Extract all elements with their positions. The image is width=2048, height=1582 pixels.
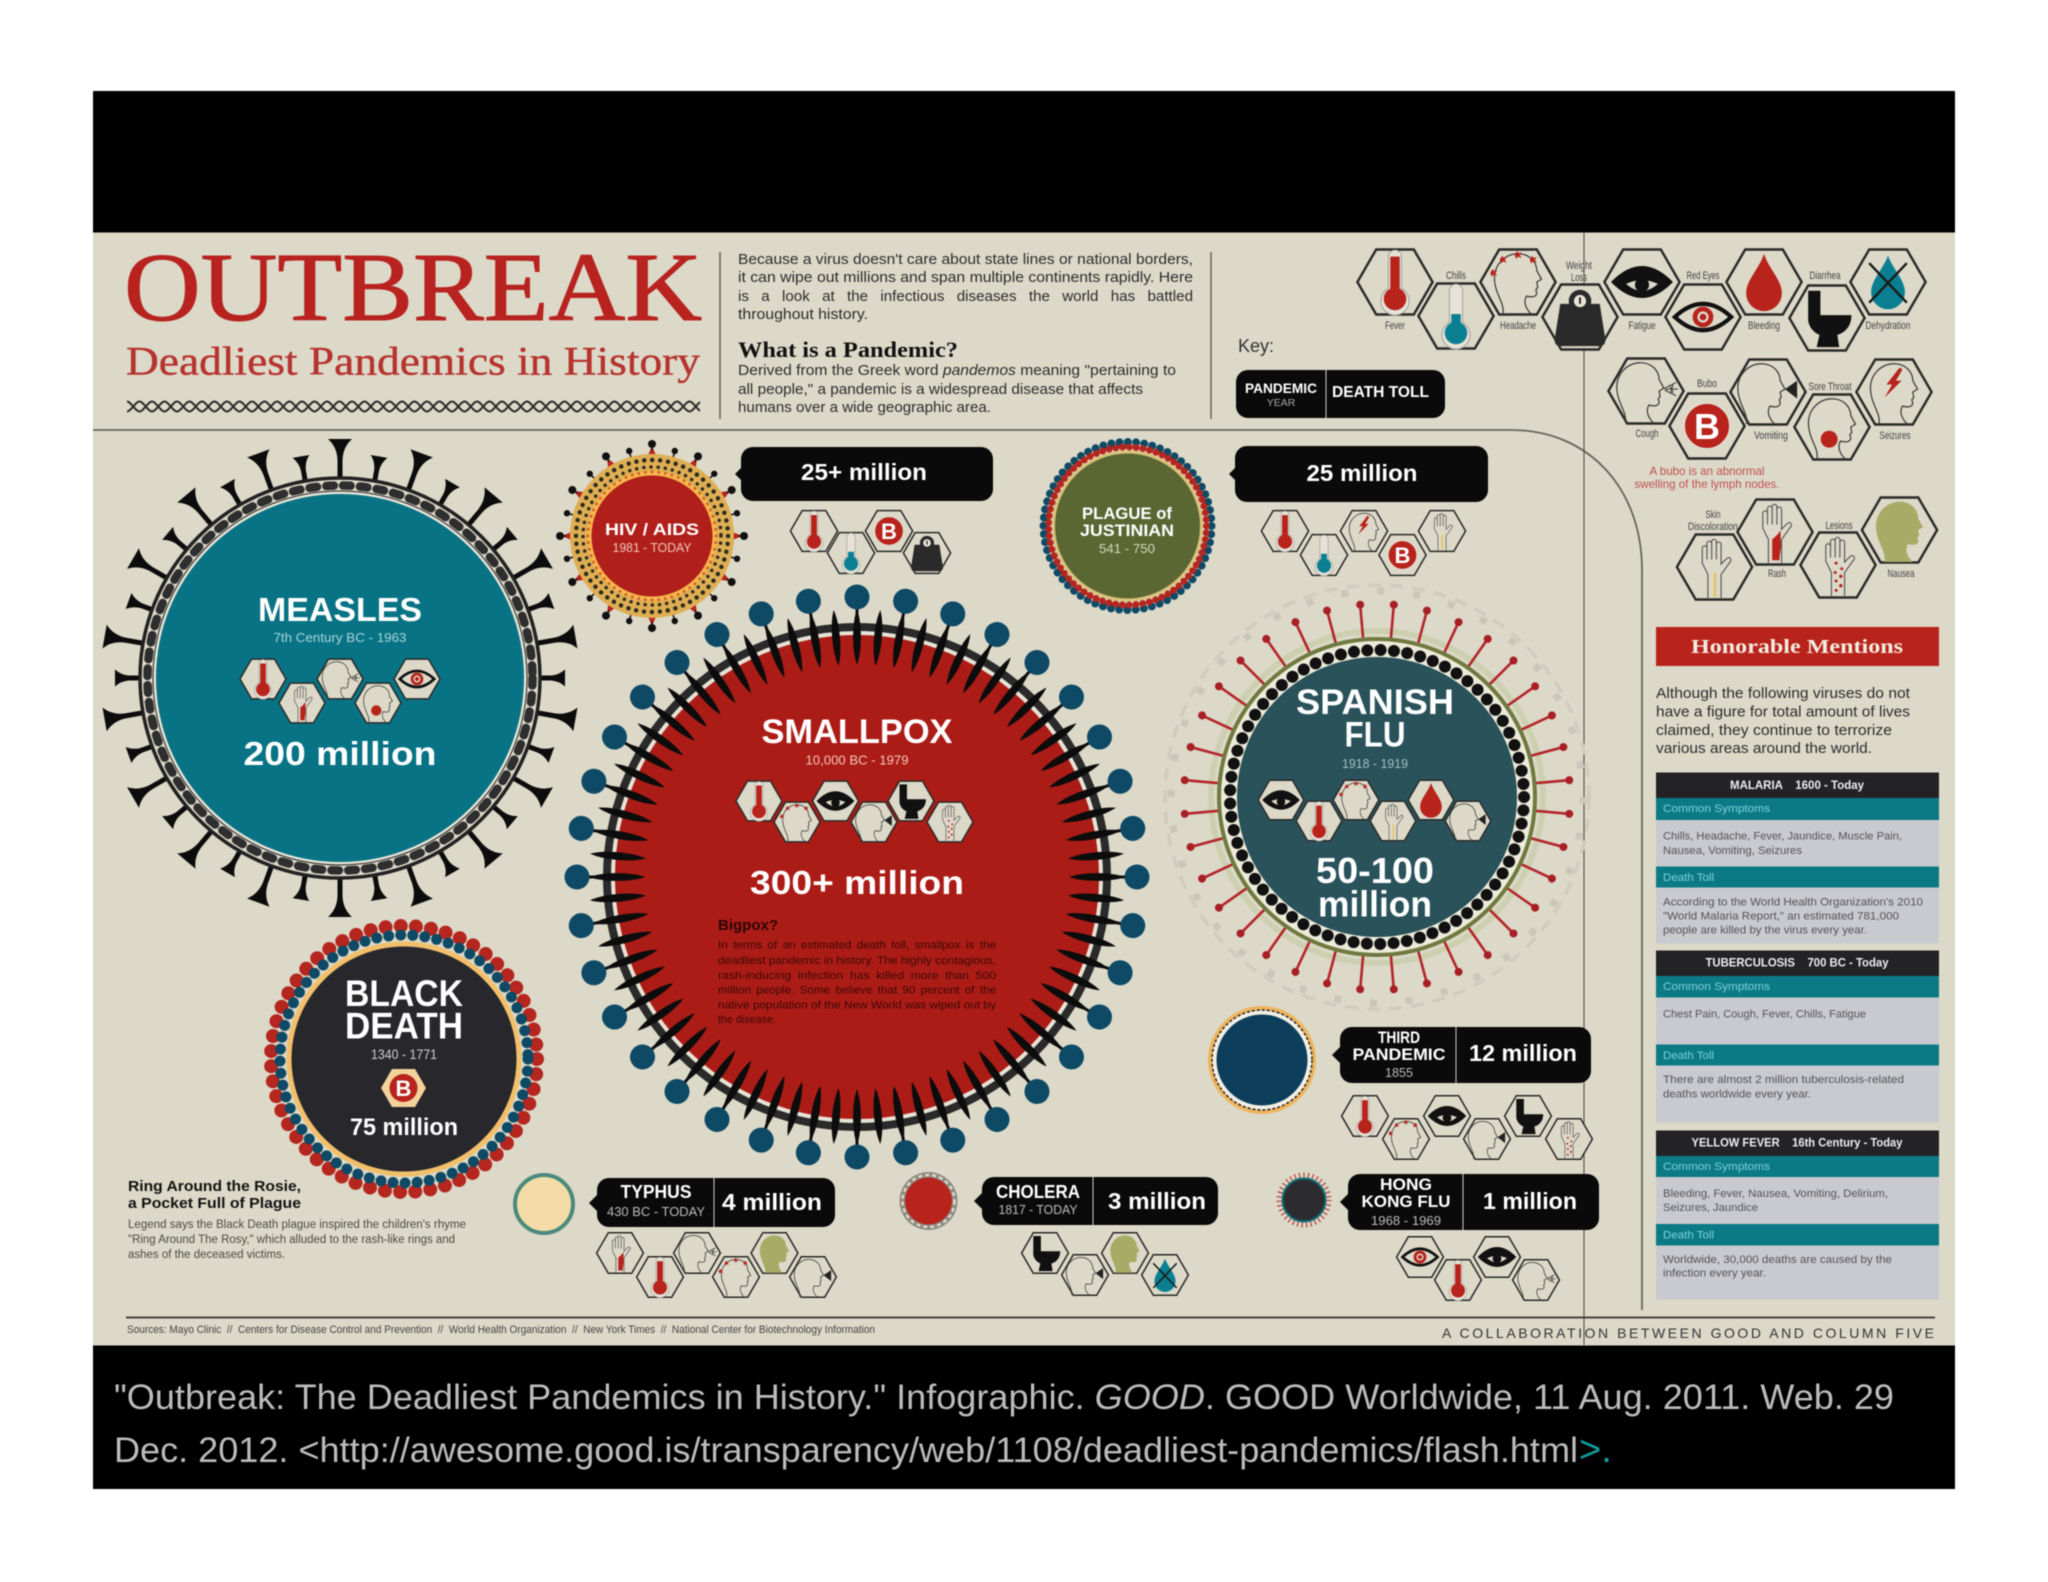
what is a pandemic block: all people," a pandemic is a widespread disease that affects	[738, 381, 1143, 398]
ring around the rosie note: Ring Around the Rosie,	[128, 1178, 301, 1195]
hong kong flu pill: HONG	[1380, 1175, 1432, 1194]
plague of Justinian virus: 541 - 750	[1099, 542, 1155, 556]
ring around the rosie note: ashes of the deceased victims.	[128, 1249, 285, 1261]
typhus virus	[515, 1175, 573, 1233]
icon: bubo	[381, 1069, 426, 1107]
third pandemic pill: PANDEMIC	[1352, 1045, 1446, 1064]
icon: headache	[1480, 249, 1556, 332]
intro text	[738, 251, 1193, 323]
bigpox note: deadliest pandemic in history. The highly contagious,	[718, 955, 996, 967]
icon: weight loss: Weight	[1566, 260, 1592, 272]
HIV death toll pill: 25+ million	[801, 459, 927, 485]
ring around the rosie note: "Ring Around The Rosy," which alluded to the rash-like rings and	[128, 1234, 455, 1246]
card: tuberculosis: Common Symptoms	[1663, 981, 1771, 993]
icon: weight loss	[1542, 260, 1618, 350]
cholera pill: CHOLERA	[996, 1182, 1080, 1202]
icon: weight loss: Loss	[1571, 272, 1587, 284]
cholera virus	[900, 1172, 958, 1230]
card: yellow fever: YELLOW FEVER 16th Century - Today	[1692, 1138, 1903, 1150]
card: malaria: According to the World Health Organization's 2010	[1663, 896, 1923, 908]
smallpox virus: 300+ million	[750, 864, 964, 901]
icon: bubo: Bubo	[1697, 378, 1717, 390]
smallpox virus: 10,000 BC - 1979	[806, 752, 908, 768]
bigpox note: Bigpox?	[718, 917, 778, 934]
icon: seizures	[1856, 359, 1932, 442]
bigpox note: the disease.	[718, 1014, 776, 1026]
Spanish flu virus: million	[1318, 884, 1432, 924]
measles virus: 200 million	[244, 735, 436, 772]
icon: fatigue	[1604, 249, 1680, 332]
typhus pill	[589, 1178, 835, 1227]
cholera pill: 1817 - TODAY	[998, 1202, 1078, 1217]
third pandemic pill: 1855	[1385, 1066, 1413, 1080]
third pandemic pill	[1332, 1027, 1591, 1083]
sources: Sources: Mayo Clinic // Centers for Disease Control and Prevention // World Health Organization // New York Times // National Center for Biotechnology Information	[127, 1324, 875, 1336]
icon: skin discoloration: Discoloration	[1688, 521, 1738, 533]
Spanish flu virus: FLU	[1344, 716, 1406, 755]
what is a pandemic block: humans over a wide geographic area.	[738, 399, 991, 416]
plague of Justinian virus: PLAGUE of	[1082, 504, 1172, 523]
card: yellow fever: Common Symptoms	[1663, 1161, 1771, 1173]
honorable mentions intro	[1656, 685, 1911, 757]
plague of Justinian virus	[1044, 442, 1212, 610]
HIV death toll pill	[735, 447, 993, 501]
typhus pill: 430 BC - TODAY	[607, 1204, 705, 1219]
third pandemic pill: THIRD	[1378, 1028, 1420, 1047]
black death virus	[271, 926, 537, 1192]
card: malaria: people are killed by the virus every year.	[1663, 924, 1867, 936]
HIV / AIDS virus	[556, 440, 748, 632]
icon: headache: Headache	[1500, 320, 1536, 332]
HIV / AIDS virus: 1981 - TODAY	[612, 541, 692, 555]
citation caption: Dec. 2012. <http://awesome.good.is/transparency/web/1108/deadliest-pandemics/flash.html	[114, 1431, 1578, 1470]
card: yellow fever	[1656, 1130, 1939, 1300]
Spanish flu virus: SPANISH	[1296, 683, 1454, 722]
honorable mentions heading	[1656, 627, 1939, 666]
icon: diarrhea: Diarrhea	[1810, 270, 1841, 282]
icon: vomiting: Vomiting	[1754, 430, 1788, 442]
card: tuberculosis: deaths worldwide every year.	[1663, 1088, 1811, 1100]
card: malaria: Death Toll	[1663, 872, 1714, 884]
poster panel	[93, 232, 1955, 1346]
crossed wave divider	[127, 400, 700, 413]
card: tuberculosis: TUBERCULOSIS 700 BC - Today	[1706, 958, 1889, 970]
bigpox note: native population of the New World was wiped out by	[718, 1000, 997, 1012]
icon: seizures: Seizures	[1880, 430, 1911, 442]
cholera pill: 3 million	[1108, 1188, 1206, 1214]
black death virus: DEATH	[345, 1006, 463, 1046]
card: yellow fever: infection every year.	[1663, 1268, 1766, 1280]
icon: nausea: Nausea	[1888, 568, 1915, 580]
citation caption: "Outbreak: The Deadliest Pandemics in History." Infographic. GOOD. GOOD Worldwide, 11 Aug. 2011. Web. 29	[114, 1378, 1894, 1417]
header rule and curved divider	[93, 430, 1642, 1310]
honorable mentions intro: claimed, they continue to terrorize	[1656, 722, 1892, 739]
card: tuberculosis: Chest Pain, Cough, Fever, Chills, Fatigue	[1663, 1008, 1866, 1020]
citation caption	[114, 1378, 1894, 1471]
icon: vomiting	[1730, 359, 1806, 442]
icon: dehydration	[1850, 249, 1926, 332]
measles virus: MEASLES	[258, 591, 422, 628]
Spanish flu virus: 1918 - 1919	[1342, 756, 1408, 771]
third pandemic pill: 12 million	[1469, 1040, 1577, 1066]
icon: bubo: B	[396, 1076, 411, 1101]
icon: bubo	[1669, 378, 1745, 459]
icon: rash	[1737, 499, 1813, 580]
HIV symptom icons	[790, 511, 951, 574]
card: yellow fever: Bleeding, Fever, Nausea, Vomiting, Delirium,	[1663, 1188, 1888, 1200]
third pandemic symptom icons	[1342, 1096, 1592, 1159]
card: malaria: "World Malaria Report," an estimated 781,000	[1663, 910, 1899, 922]
key: PANDEMIC	[1245, 380, 1317, 396]
honorable mentions heading: Honorable Mentions	[1691, 636, 1903, 658]
icon: bubo: B	[1694, 406, 1720, 447]
icon: sore throat: Sore Throat	[1808, 381, 1852, 393]
icon: rash: Rash	[1768, 568, 1786, 580]
panel: honorable mentions	[1656, 627, 1939, 1300]
hong kong flu pill: 1968 - 1969	[1371, 1213, 1441, 1228]
card: tuberculosis: There are almost 2 million tuberculosis-related	[1663, 1074, 1904, 1086]
card: malaria: Chills, Headache, Fever, Jaundice, Muscle Pain,	[1663, 830, 1902, 842]
honorable mentions intro: have a figure for total amount of lives	[1656, 704, 1910, 720]
icon: cough	[1608, 358, 1684, 440]
typhus pill: 4 million	[722, 1189, 822, 1215]
card: malaria	[1656, 772, 1939, 944]
plague of Justinian pill	[1229, 446, 1488, 502]
key: YEAR	[1267, 397, 1296, 409]
title: OUTBREAK	[124, 234, 702, 342]
icon: cough: Cough	[1636, 428, 1658, 440]
key: Key:	[1238, 336, 1274, 356]
card: malaria: MALARIA 1600 - Today	[1730, 780, 1865, 792]
subtitle: Deadliest Pandemics in History	[126, 338, 700, 384]
icon: dehydration: Dehydration	[1866, 320, 1910, 332]
Spanish flu virus	[1164, 584, 1590, 1010]
bubo note: swelling of the lymph nodes.	[1634, 477, 1780, 491]
HIV symptom icons: B	[881, 519, 897, 544]
what is a pandemic block: What is a Pandemic?	[738, 337, 958, 362]
bigpox note	[718, 917, 997, 1026]
Spanish flu virus: 50-100	[1316, 850, 1434, 891]
header vertical rules	[720, 252, 1211, 419]
icon: fatigue: Fatigue	[1628, 320, 1656, 332]
icon: chills	[1418, 270, 1494, 349]
bubo note	[1634, 464, 1780, 491]
hong kong flu virus	[1279, 1175, 1329, 1225]
card: yellow fever: Death Toll	[1663, 1230, 1714, 1242]
plague symptom icons: B	[1395, 543, 1410, 568]
icon: chills: Chills	[1446, 270, 1466, 282]
intro text: is a look at the infectious diseases the world has battled	[738, 288, 1193, 305]
cholera symptom icons	[1022, 1233, 1188, 1295]
bigpox note: million people. Some believe that 90 percent of the	[718, 985, 996, 997]
intro text: it can wipe out millions and span multiple continents rapidly. Here	[738, 269, 1193, 286]
what is a pandemic block: Derived from the Greek word pandemos meaning "pertaining to	[738, 362, 1176, 379]
icon: bleeding: Bleeding	[1748, 320, 1780, 332]
honorable mentions intro: various areas around the world.	[1656, 740, 1872, 757]
plague of Justinian virus: JUSTINIAN	[1080, 521, 1174, 540]
plague of Justinian pill: 25 million	[1306, 460, 1418, 486]
icon: lesions	[1800, 520, 1876, 598]
intro text: Because a virus doesn't care about state lines or national borders,	[738, 251, 1193, 268]
icon: bleeding	[1726, 249, 1802, 332]
hong kong flu pill: 1 million	[1483, 1188, 1577, 1214]
ring around the rosie note: a Pocket Full of Plague	[128, 1195, 301, 1212]
hong kong flu symptom icons	[1397, 1237, 1559, 1301]
black death virus: BLACK	[345, 973, 463, 1014]
honorable mentions intro: Although the following viruses do not	[1656, 685, 1911, 702]
intro text: throughout history.	[738, 306, 868, 323]
bigpox note: rash-inducing infection has killed more than 500	[718, 970, 996, 982]
what is a pandemic block	[738, 337, 1176, 416]
card: tuberculosis	[1656, 950, 1939, 1122]
black death virus: 75 million	[350, 1114, 458, 1141]
card: malaria: Nausea, Vomiting, Seizures	[1663, 845, 1802, 857]
bigpox note: In terms of an estimated death toll, smallpox is the	[718, 940, 996, 952]
key: DEATH TOLL	[1332, 384, 1429, 401]
HIV / AIDS virus: HIV / AIDS	[605, 520, 699, 539]
icon: red eyes	[1665, 270, 1741, 350]
icon: skin discoloration	[1677, 509, 1752, 600]
icon: skin discoloration: Skin	[1706, 509, 1720, 521]
cholera pill	[974, 1177, 1218, 1225]
bottom rule	[126, 1316, 1935, 1318]
third pandemic virus	[1208, 1006, 1316, 1114]
black death virus: 1340 - 1771	[371, 1047, 437, 1062]
smallpox virus: SMALLPOX	[762, 713, 953, 751]
card: tuberculosis: Death Toll	[1663, 1050, 1714, 1062]
icon: lesions: Lesions	[1826, 520, 1853, 532]
typhus symptom icons	[597, 1233, 836, 1298]
icon: fever: Fever	[1385, 320, 1405, 332]
key	[1236, 336, 1445, 418]
card: yellow fever: Seizures, Jaundice	[1663, 1202, 1758, 1214]
collaboration credit: A COLLABORATION BETWEEN GOOD AND COLUMN FIVE	[1442, 1325, 1934, 1341]
bubo note: A bubo is an abnormal	[1650, 464, 1764, 478]
icon: red eyes: Red Eyes	[1686, 270, 1720, 282]
ring around the rosie note: Legend says the Black Death plague inspired the children's rhyme	[128, 1219, 466, 1231]
icon: sore throat	[1794, 381, 1870, 460]
hong kong flu pill: KONG FLU	[1362, 1192, 1450, 1211]
hong kong flu pill	[1340, 1174, 1599, 1230]
typhus pill: TYPHUS	[620, 1182, 692, 1202]
icon: diarrhea	[1789, 270, 1865, 351]
measles virus	[96, 437, 584, 919]
measles virus: 7th Century BC - 1963	[274, 630, 406, 645]
citation caption: >.	[1579, 1429, 1612, 1471]
symptom legend	[1357, 249, 1937, 600]
card: malaria: Common Symptoms	[1663, 803, 1771, 815]
thin vertical line	[1583, 232, 1585, 1345]
plague symptom icons	[1261, 511, 1466, 576]
icon: nausea	[1862, 497, 1937, 580]
icon: fever	[1357, 249, 1433, 332]
ring around the rosie note	[128, 1178, 466, 1261]
card: yellow fever: Worldwide, 30,000 deaths are caused by the	[1663, 1254, 1892, 1266]
smallpox virus	[564, 584, 1150, 1170]
